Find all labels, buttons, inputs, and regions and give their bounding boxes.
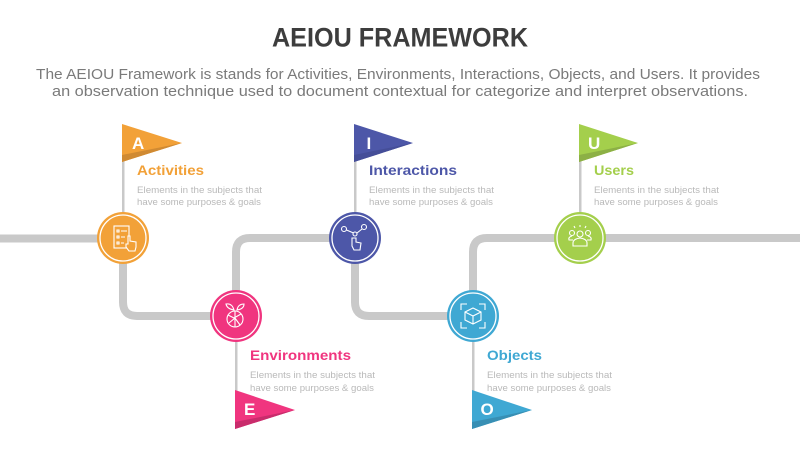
description: Elements in the subjects that (369, 185, 494, 196)
description: Elements in the subjects that (250, 370, 375, 381)
heading: Objects: Objects (487, 347, 542, 363)
heading: Users: Users (594, 162, 634, 178)
icon: plant and globe (226, 304, 244, 327)
flag pole (354, 155, 356, 215)
subtitle text block: The AEIOU Framework is stands for Activities, Environments, Interactions, Objects, and Users. It provides (36, 66, 760, 83)
flag pole (235, 340, 238, 392)
description (137, 185, 262, 208)
flag E: E (244, 400, 255, 419)
icon: touch network (342, 224, 366, 250)
description: have some purposes & goals (369, 197, 493, 208)
panel: Users (554, 124, 719, 264)
icon: group of people (569, 225, 591, 246)
flag U (579, 124, 638, 162)
description: Elements in the subjects that (137, 185, 262, 196)
node circle (210, 290, 262, 342)
panel: Environments (210, 290, 375, 429)
description (487, 370, 612, 394)
flag U: U (588, 134, 600, 153)
node circle (554, 212, 606, 264)
description: have some purposes & goals (137, 197, 261, 208)
flag A (122, 124, 182, 162)
flag pole (579, 155, 582, 215)
heading: Environments: Environments (250, 347, 351, 363)
title: AEIOU FRAMEWORK (272, 22, 528, 52)
panel: Interactions (329, 124, 494, 264)
flag O (472, 390, 532, 429)
flag pole (122, 155, 124, 215)
description: have some purposes & goals (487, 383, 611, 394)
flag O: O (480, 400, 494, 419)
node circle (447, 290, 499, 342)
icon: checklist with hand (114, 226, 136, 251)
flag pole (472, 340, 474, 392)
panel: Objects (447, 290, 612, 429)
subtitle text block (36, 66, 760, 100)
panel: Activities (97, 124, 262, 264)
description: have some purposes & goals (594, 197, 718, 208)
heading: Interactions: Interactions (369, 162, 457, 178)
node circle (329, 212, 381, 264)
heading: Activities: Activities (137, 162, 204, 178)
subtitle text block: an observation technique used to document contextual for categorize and interpret observations. (52, 83, 748, 100)
flag E (235, 390, 295, 429)
description: Elements in the subjects that (487, 370, 612, 381)
flag I: I (366, 134, 371, 153)
description (594, 185, 719, 208)
description (250, 370, 375, 394)
node circle (97, 212, 149, 264)
flag A: A (132, 134, 144, 153)
description: Elements in the subjects that (594, 185, 719, 196)
flag I (354, 124, 413, 162)
description (369, 185, 494, 208)
icon: scanned cube (461, 304, 485, 328)
description: have some purposes & goals (250, 383, 374, 394)
winding road connector (0, 238, 800, 316)
